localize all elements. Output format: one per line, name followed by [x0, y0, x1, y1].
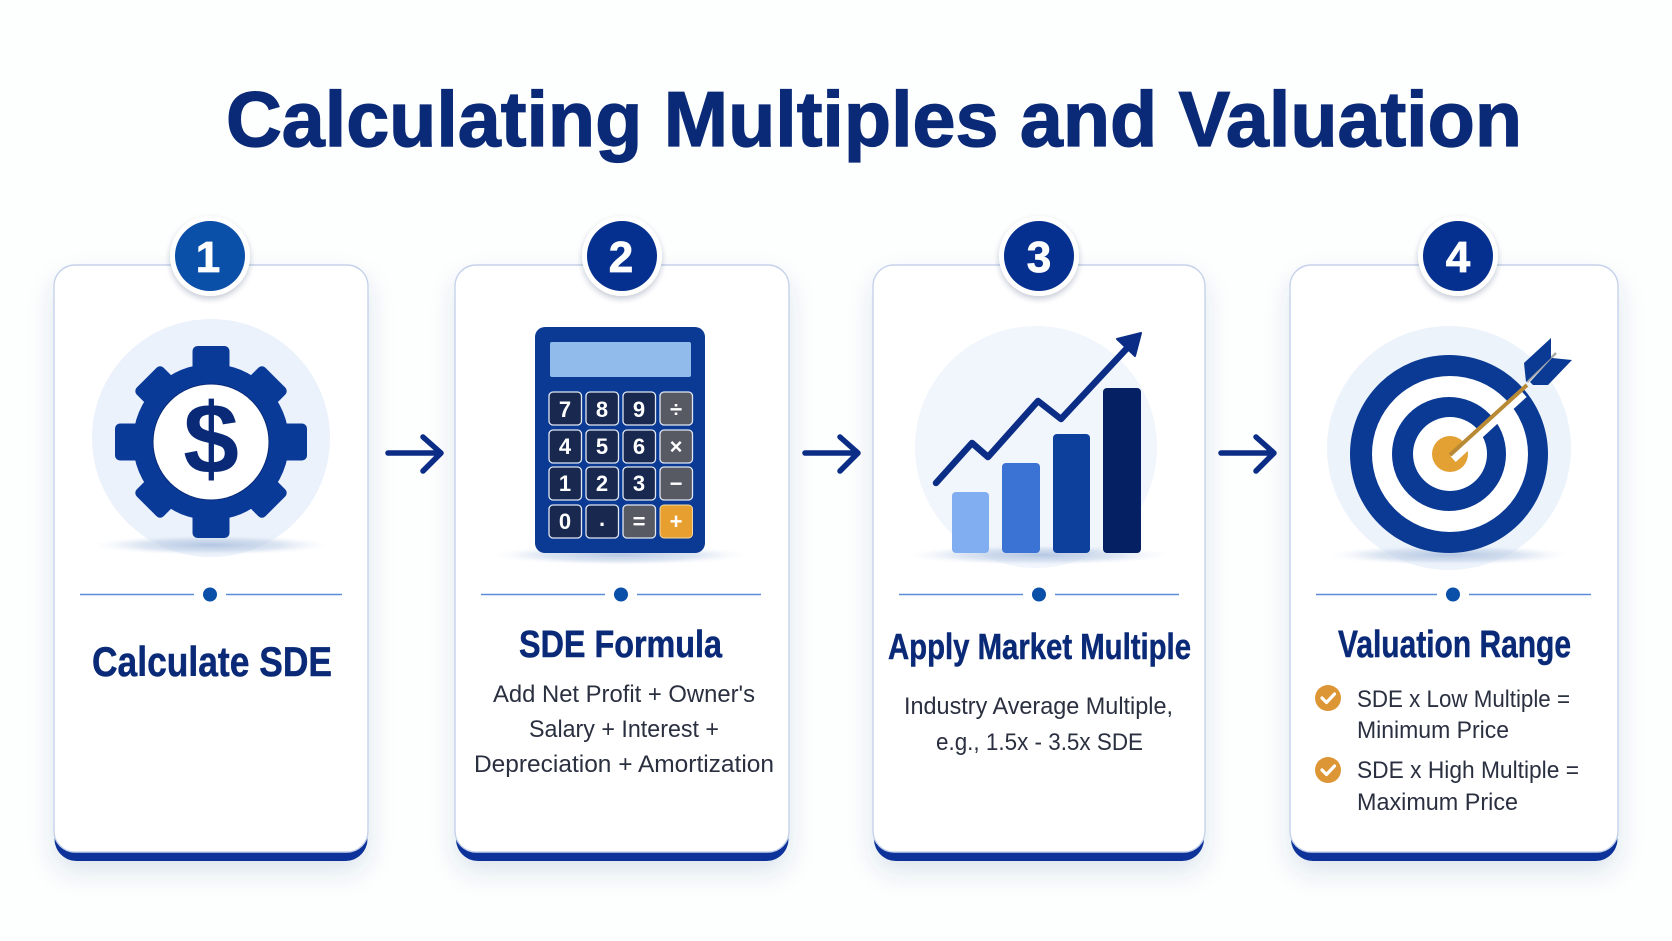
text: formula description: Salary + Interest +: [529, 716, 719, 743]
badge: number 1: [170, 216, 250, 296]
badge: number 4: [1418, 216, 1498, 296]
icon: calculator: +: [670, 509, 682, 534]
panel: step 4 valuation range: [1290, 216, 1618, 861]
arrow: step 2 to 3: [805, 437, 858, 471]
heading: Valuation Range: Valuation Range: [1338, 624, 1571, 666]
heading: Calculate SDE: Calculate SDE: [92, 638, 332, 685]
list item: maximum price: [1315, 757, 1579, 816]
text: multiple description: Industry Average Multiple,: [904, 693, 1173, 720]
list item: maximum price: Maximum Price: [1357, 789, 1518, 816]
badge: number 1: 1: [196, 233, 220, 282]
icon: calculator: 1: [559, 471, 571, 496]
badge: number 2: [582, 216, 662, 296]
icon: gear with dollar sign: [92, 319, 330, 557]
list item: minimum price: SDE x Low Multiple =: [1357, 686, 1570, 713]
heading: SDE Formula: SDE Formula: [519, 624, 723, 666]
text: multiple description: [904, 693, 1173, 756]
icon: calculator: =: [633, 509, 645, 534]
title: Calculating Multiples and Valuation: [226, 75, 1522, 163]
icon: calculator: 4: [559, 434, 572, 459]
icon: calculator: ×: [670, 434, 682, 459]
icon: calculator: 8: [596, 397, 608, 422]
icon: calculator: 2: [596, 471, 608, 496]
panel: step 2 SDE formula: [455, 216, 789, 861]
text: formula description: Depreciation + Amortization: [474, 751, 774, 778]
list item: minimum price: [1315, 685, 1570, 744]
badge: number 3: [999, 216, 1079, 296]
icon: calculator: 5: [596, 434, 608, 459]
icon: calculator: 3: [633, 471, 645, 496]
icon: calculator: 9: [633, 397, 645, 422]
arrow: step 3 to 4: [1221, 437, 1274, 471]
heading: Apply Market Multiple: Apply Market Multiple: [888, 626, 1191, 667]
list item: maximum price: SDE x High Multiple =: [1357, 757, 1579, 784]
text: multiple description: e.g., 1.5x - 3.5x SDE: [936, 729, 1143, 756]
icon: calculator: [494, 327, 746, 565]
icon: calculator: 0: [559, 509, 571, 534]
text: formula description: [474, 681, 774, 778]
icon: calculator: .: [599, 506, 605, 531]
icon: calculator: −: [670, 471, 682, 496]
panel: step 3 apply market multiple: [873, 216, 1205, 861]
icon: calculator: ÷: [670, 397, 682, 422]
icon: target with dart: [1327, 326, 1572, 570]
panel: step 1 calculate SDE: [54, 216, 368, 861]
badge: number 3: 3: [1027, 233, 1051, 282]
icon: calculator: 7: [559, 397, 571, 422]
icon: rising bar chart with arrow: [909, 326, 1169, 568]
text: formula description: Add Net Profit + Owner's: [493, 681, 755, 708]
arrow: step 1 to 2: [388, 437, 441, 471]
icon: calculator: 6: [633, 434, 645, 459]
badge: number 2: 2: [609, 233, 633, 282]
icon: gear with dollar sign: $: [183, 383, 239, 495]
list item: minimum price: Minimum Price: [1357, 717, 1509, 744]
badge: number 4: 4: [1446, 233, 1471, 282]
